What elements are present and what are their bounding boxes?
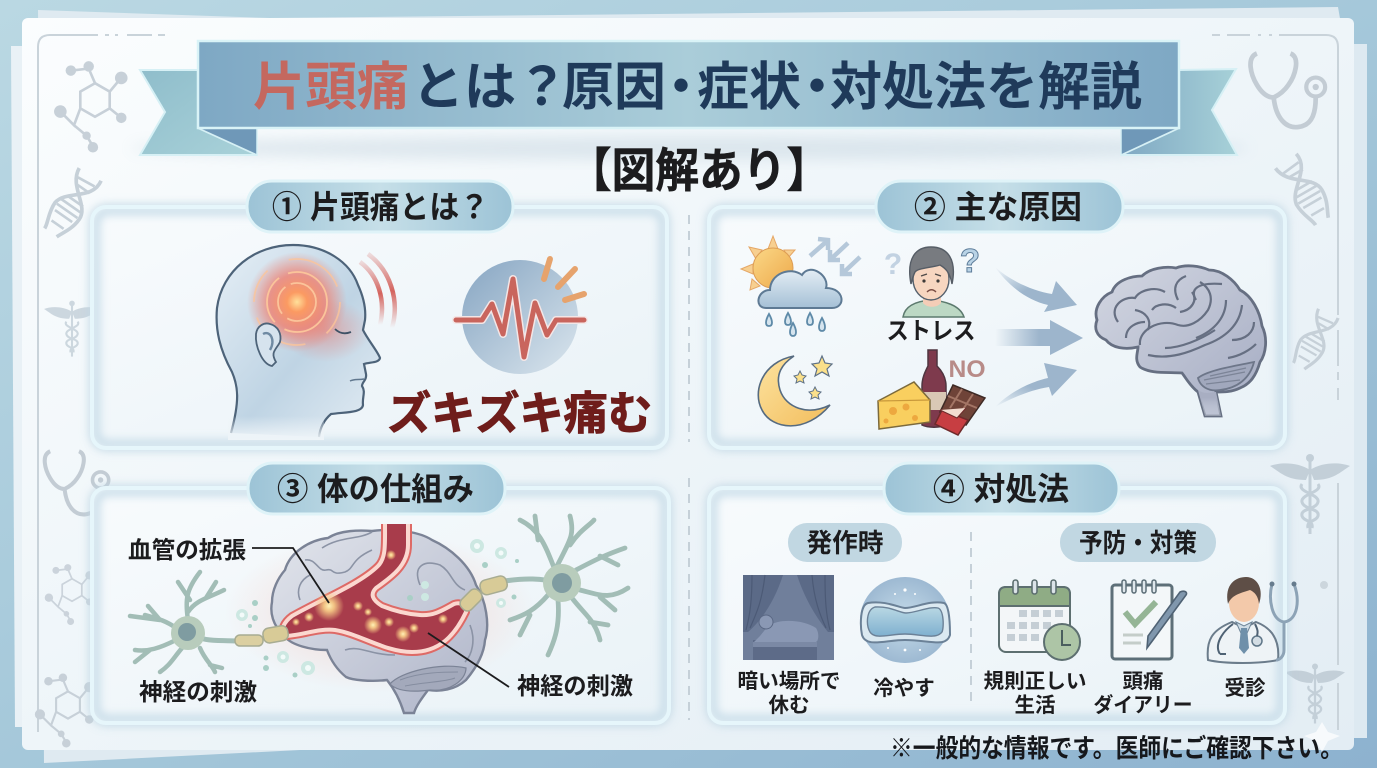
dashed column dividers xyxy=(688,215,690,720)
heading pill xyxy=(247,181,513,232)
label: regular life xyxy=(984,670,1086,717)
icon: head with migraine xyxy=(217,245,380,440)
icon: trigger foods xyxy=(878,350,986,435)
icon: dilated blood vessel xyxy=(282,524,466,652)
heading pill: ② 主な原因 xyxy=(914,189,1082,225)
title text: ・ xyxy=(655,59,707,117)
title text: 片頭痛 xyxy=(253,59,409,117)
icon: weather change xyxy=(741,236,860,336)
icon: headache diary xyxy=(1112,580,1187,659)
panel 1: what is migraine xyxy=(92,181,667,448)
banner plate xyxy=(198,41,1179,128)
icon: worried person: ? xyxy=(960,242,980,279)
panel frame xyxy=(709,488,1285,723)
icon: worried person: ? xyxy=(884,248,902,281)
icon: throbbing pulse xyxy=(456,259,584,374)
panel frame xyxy=(92,488,669,723)
ribbon: left tail xyxy=(140,70,257,155)
callout: vasodilation: 血管の拡張 xyxy=(128,537,247,563)
label: see doctor: 受診 xyxy=(1224,677,1266,700)
heading pill: ① 片頭痛とは？ xyxy=(272,189,489,225)
sparkle mark xyxy=(1304,722,1340,752)
title banner xyxy=(130,41,1250,160)
label: cool down: 冷やす xyxy=(873,677,935,700)
glow behind brain xyxy=(225,532,535,692)
icon: brain cross-section xyxy=(271,530,487,713)
ribbon: right tail xyxy=(1121,69,1237,155)
icon: right neuron xyxy=(458,516,628,655)
icon: brain xyxy=(1096,266,1266,416)
ear xyxy=(256,323,281,366)
icon: trigger foods: NO xyxy=(948,356,986,383)
label: rest in dark place: 暗い場所で xyxy=(738,670,840,693)
label: stress: ストレス xyxy=(886,318,976,345)
eye xyxy=(335,329,351,333)
icon: dark room xyxy=(743,575,834,660)
label: rest in dark place xyxy=(738,670,840,717)
subtitle: 【図解あり】 xyxy=(568,144,830,197)
panel frame xyxy=(92,207,667,448)
panel 3: mechanism xyxy=(92,463,669,723)
arrows toward brain xyxy=(995,267,1083,407)
panel 4: treatment xyxy=(709,463,1297,723)
title text xyxy=(253,59,1142,117)
heading pill: ④ 対処法 xyxy=(933,471,1069,507)
sub-heading: prevention: 予防・対策 xyxy=(1079,528,1197,558)
title text: ・ xyxy=(791,59,843,117)
label: headache diary: ダイアリー xyxy=(1094,693,1192,717)
title text: 症状 xyxy=(697,59,801,117)
icon: doctor xyxy=(1208,577,1297,663)
icon: worried person xyxy=(884,242,980,317)
callout: nerve stimulation right xyxy=(428,633,633,699)
label: regular life: 規則正しい xyxy=(984,670,1086,693)
label: rest in dark place: 休む xyxy=(768,694,810,717)
label: headache diary: 頭痛 xyxy=(1122,670,1164,693)
heading pill xyxy=(876,181,1123,232)
sub-heading: prevention xyxy=(1060,523,1216,562)
label: throbbing pain: ズキズキ痛む xyxy=(387,388,652,439)
icon: cold pack xyxy=(860,577,950,663)
heading pill: ③ 体の仕組み xyxy=(277,471,474,507)
icon: calendar and clock xyxy=(999,580,1080,660)
icon: radiating pain arcs xyxy=(360,254,395,328)
neurotransmitter particles xyxy=(236,539,519,678)
label: regular life: 生活 xyxy=(1014,694,1056,717)
panel 2: main causes xyxy=(709,181,1285,448)
icon: crescent moon and stars xyxy=(758,356,832,426)
label: headache diary xyxy=(1094,670,1192,717)
callout: vasodilation xyxy=(128,537,329,603)
panel frame xyxy=(709,207,1285,448)
divider: attack vs prevention xyxy=(970,532,972,705)
sub-heading: during attack xyxy=(788,523,902,562)
neck fade xyxy=(228,416,324,440)
heading pill xyxy=(248,463,505,514)
title text: 対処法を解説 xyxy=(830,59,1142,117)
title text: とは？ xyxy=(412,59,568,117)
sub-heading: during attack: 発作時 xyxy=(806,528,884,558)
heading pill xyxy=(884,463,1119,514)
title text: 原因 xyxy=(562,59,666,117)
callout: nerve stimulation right: 神経の刺激 xyxy=(517,673,633,699)
icon: left neuron xyxy=(130,572,289,672)
label: nerve stimulation left: 神経の刺激 xyxy=(139,679,258,705)
